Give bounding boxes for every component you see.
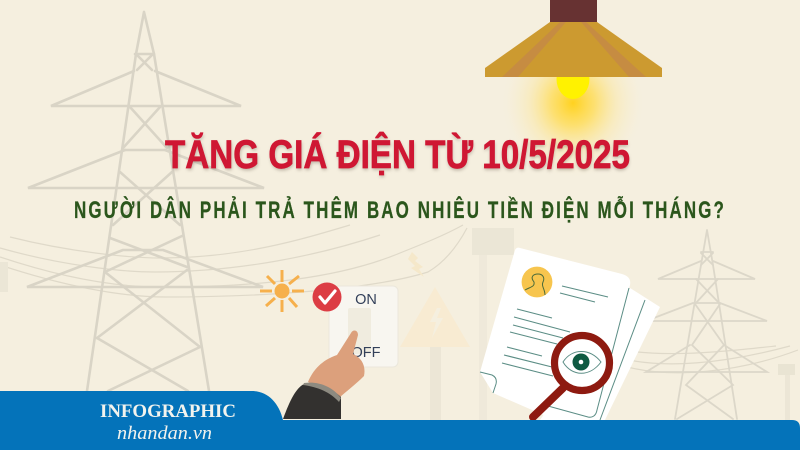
icon: faded insulator right — [778, 364, 795, 420]
icon: red check badge — [312, 282, 342, 312]
footer label: nhandan.vn: nhandan.vn — [117, 424, 212, 444]
icon: faded warning sign — [400, 287, 470, 421]
icon: left transmission tower — [27, 12, 264, 391]
icon: pointing hand — [283, 331, 365, 419]
icon: faded electric pole — [0, 228, 514, 420]
icon: document — [480, 248, 660, 420]
label: ON: ON — [355, 292, 377, 308]
icon: right transmission tower — [646, 230, 767, 419]
footer bar — [0, 391, 800, 450]
icon: light switch — [329, 286, 398, 367]
title shadow: TĂNG GIÁ ĐIỆN TỪ 10/5/2025 — [166, 133, 630, 179]
footer label: INFOGRAPHIC: INFOGRAPHIC — [100, 401, 236, 422]
icon: sun — [260, 270, 304, 312]
icon: faded power lines — [0, 225, 798, 373]
icon: hanging lamp — [485, 0, 662, 99]
text lines — [502, 286, 608, 376]
icon: lamp glow — [501, 27, 645, 179]
icon: avatar — [522, 267, 552, 297]
label: OFF: OFF — [352, 345, 381, 361]
title: TĂNG GIÁ ĐIỆN TỪ 10/5/2025 — [165, 131, 630, 177]
icon: magnifying glass — [533, 336, 610, 417]
